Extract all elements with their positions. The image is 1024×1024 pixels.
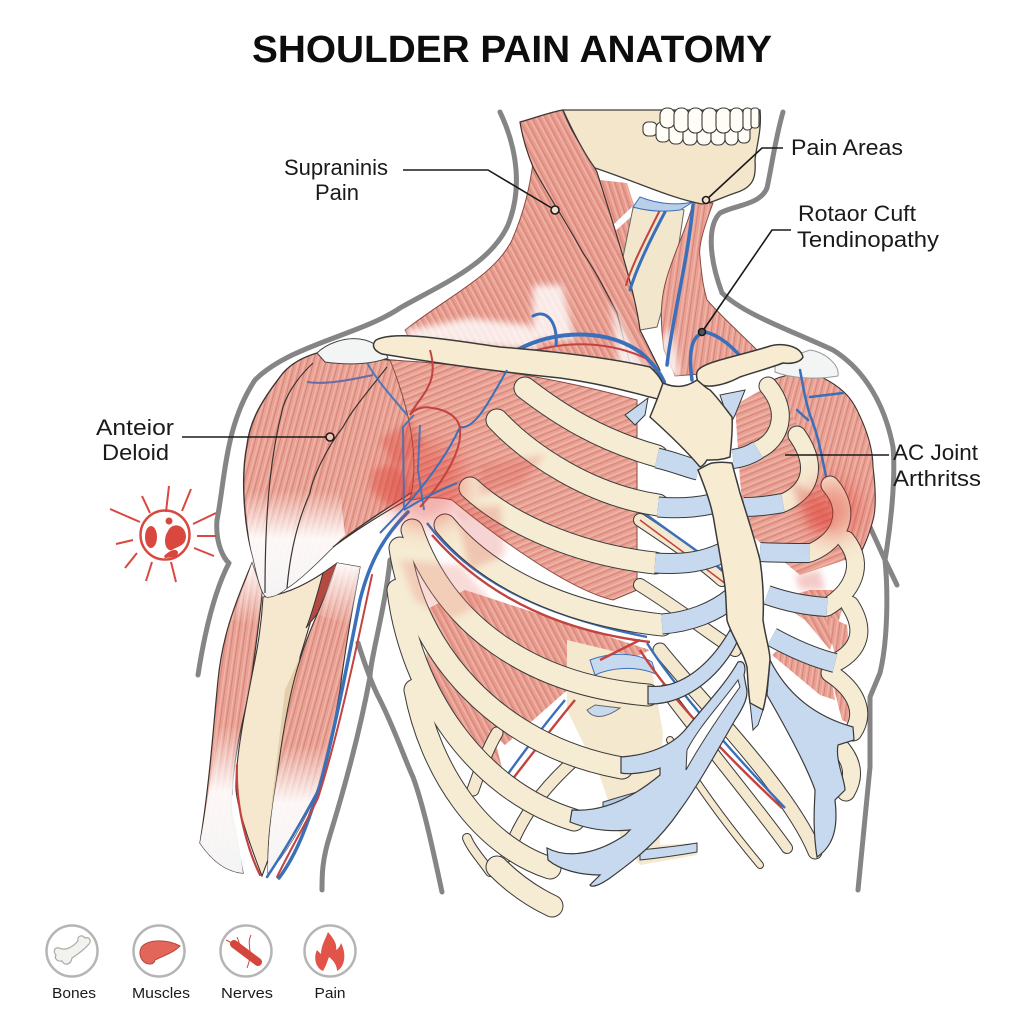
tendon: right acromion bbox=[775, 350, 838, 378]
callout: pain icon bbox=[110, 486, 216, 582]
tendon: deltoid white base bbox=[247, 490, 345, 597]
neck and trapezius muscles bbox=[405, 110, 757, 382]
muscle: sternocleidomastoid bbox=[520, 110, 660, 370]
legend: nerves bbox=[220, 926, 273, 1002]
back ribs and spine bbox=[427, 510, 815, 872]
muscle: lower right strips bbox=[772, 615, 852, 725]
legend bbox=[46, 926, 356, 1002]
cartilage: right lower fan bbox=[767, 660, 854, 857]
label: Pain Areas bbox=[702, 135, 903, 204]
legend: bones: Bones bbox=[52, 985, 96, 1002]
left ribs bbox=[398, 388, 747, 906]
cartilage: hyoid bbox=[633, 197, 693, 211]
label: Rotaor Cuft Tendinopathy: Tendinopathy bbox=[797, 227, 939, 252]
bone: humerus bbox=[236, 573, 323, 876]
bone: left clavicle bbox=[374, 336, 665, 400]
bone: cervical vertebrae bbox=[622, 204, 684, 330]
cartilage: upper left costal bbox=[655, 458, 733, 624]
label: Supraninis Pain: Pain bbox=[315, 180, 359, 205]
teeth bbox=[643, 108, 759, 145]
muscle: biceps inner bbox=[268, 563, 360, 873]
bones: back ribs bbox=[467, 520, 815, 872]
pectoral muscle left bbox=[390, 360, 650, 780]
cartilage: lower fan bbox=[547, 662, 747, 886]
label: Anteior Deloid bbox=[96, 415, 334, 465]
right ribs bbox=[733, 386, 859, 857]
muscle: deltoid bbox=[244, 353, 480, 597]
vessels: arm bbox=[237, 512, 408, 878]
cartilage: fifth costal bbox=[648, 630, 738, 704]
label: Supraninis Pain: Supraninis bbox=[284, 155, 388, 180]
legend: pain bbox=[304, 926, 356, 1002]
cartilage: clavicular joints bbox=[625, 390, 745, 425]
body outline bbox=[198, 112, 897, 892]
cartilage: right costal bbox=[733, 450, 835, 663]
acromion left bbox=[317, 339, 388, 364]
legend: nerves: Nerves bbox=[221, 985, 273, 1002]
muscle division lines bbox=[265, 363, 543, 593]
pain: right chest glow bbox=[806, 482, 858, 538]
vessels: intercostal bbox=[427, 510, 785, 808]
tendon: outer arm white bbox=[200, 725, 243, 873]
muscle: right neck bbox=[661, 203, 757, 376]
legend: pain: Pain bbox=[314, 985, 346, 1002]
muscle: deep neck left bbox=[600, 180, 634, 290]
muscle: serratus bbox=[425, 590, 650, 745]
bone: right clavicle bbox=[696, 345, 803, 386]
label: Rotaor Cuft Tendinopathy: Rotaor Cuft bbox=[798, 201, 916, 226]
vessels: neck bbox=[517, 205, 742, 382]
cartilage: xiphoid bbox=[750, 703, 763, 730]
pain: left shoulder glow bbox=[383, 443, 467, 527]
legend: muscles bbox=[132, 926, 190, 1002]
bone: mandible bbox=[563, 110, 760, 204]
fan slit bbox=[686, 680, 740, 770]
bone: manubrium bbox=[650, 380, 732, 467]
muscle: right pectoral bbox=[735, 385, 845, 575]
title: SHOULDER PAIN ANATOMY bbox=[252, 29, 772, 71]
tendon: neck white patches bbox=[405, 285, 680, 376]
label: AC Joint Arthritss bbox=[785, 440, 981, 491]
jaw and teeth bbox=[563, 108, 760, 204]
label: AC Joint Arthritss: AC Joint bbox=[893, 440, 978, 465]
clavicles and sternum bbox=[374, 336, 803, 730]
pain areas bbox=[370, 420, 858, 620]
legend: bones bbox=[46, 926, 98, 1002]
label: Rotaor Cuft Tendinopathy bbox=[698, 201, 939, 336]
bone: thoracic spine bbox=[567, 640, 697, 865]
shoulder vessels over pain bbox=[307, 350, 507, 533]
arm muscles and humerus bbox=[200, 512, 408, 878]
label: AC Joint Arthritss: Arthritss bbox=[893, 466, 981, 491]
label: Anteior Deloid: Anteior bbox=[96, 415, 174, 440]
label: Supraninis Pain bbox=[284, 155, 559, 214]
left deltoid bbox=[244, 339, 543, 597]
bone: sternum body bbox=[698, 462, 770, 710]
label: Pain Areas: Pain Areas bbox=[791, 135, 903, 160]
muscle: biceps outer bbox=[200, 563, 262, 873]
muscle: left trapezius bbox=[405, 163, 640, 372]
muscle: right deltoid bbox=[773, 374, 875, 567]
right shoulder muscles bbox=[735, 350, 875, 725]
label: Anteior Deloid: Deloid bbox=[102, 440, 169, 465]
vessels: right shoulder bbox=[797, 370, 843, 485]
muscle: dark inner strip bbox=[306, 563, 340, 628]
legend: muscles: Muscles bbox=[132, 985, 190, 1002]
tendon: lower arm fade bbox=[268, 745, 332, 873]
